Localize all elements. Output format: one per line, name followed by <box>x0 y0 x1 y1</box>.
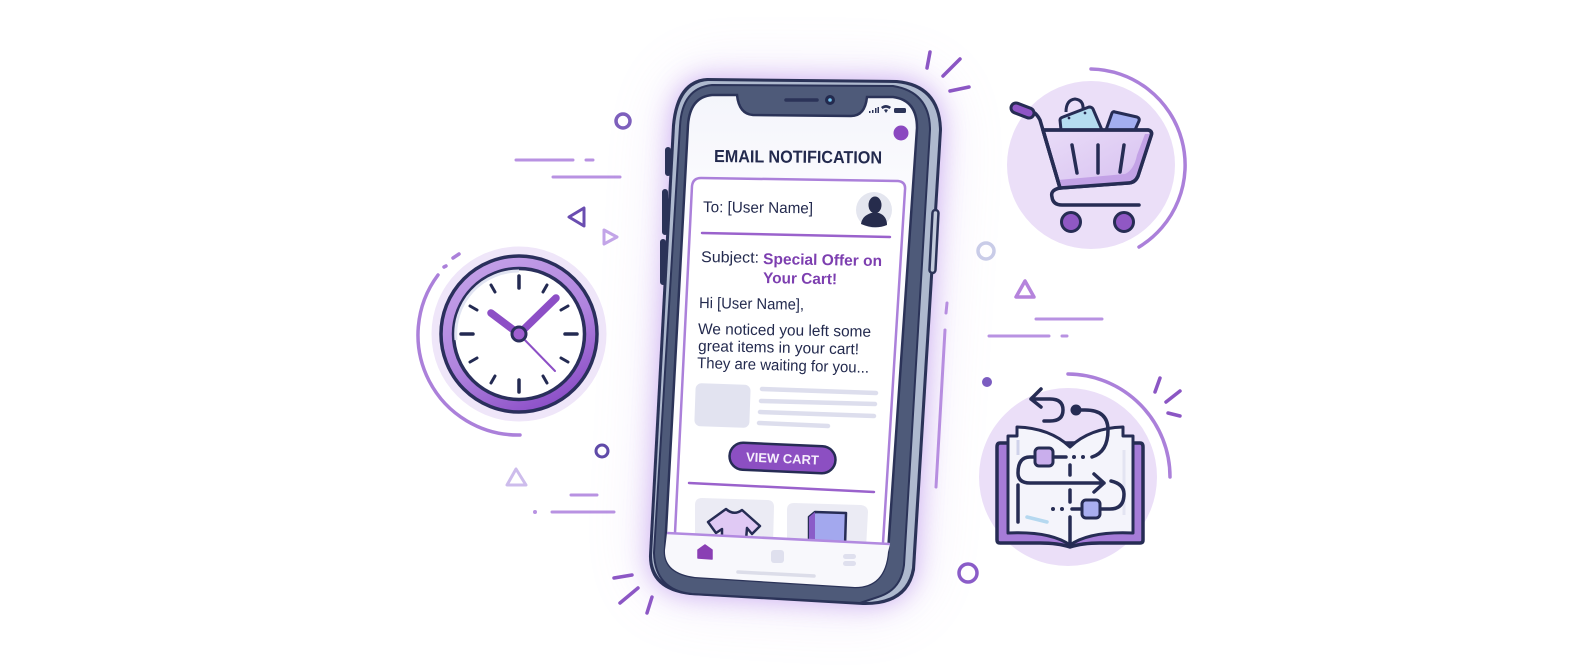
product tile: shirt <box>695 498 774 545</box>
avatar <box>856 192 892 228</box>
decoration: right accents <box>927 52 1180 582</box>
subject: Subject: <box>701 249 759 267</box>
decoration: left accents <box>507 114 652 613</box>
product tile: book <box>787 503 868 548</box>
email card outline <box>675 178 905 543</box>
shopping bag <box>1060 99 1139 130</box>
product placeholder <box>694 383 876 428</box>
icon: open book with journey flow <box>979 374 1170 566</box>
heading: email notification: EMAIL NOTIFICATION <box>714 146 882 167</box>
screen <box>665 95 917 587</box>
icon: shopping cart <box>1007 69 1185 249</box>
subject: Special Offer on <box>763 251 882 270</box>
bottom navigation bar <box>665 533 890 587</box>
icon: clock <box>418 246 606 435</box>
email body: They are waiting for you... <box>697 355 869 377</box>
email body: We noticed you left some <box>698 321 871 341</box>
button: view cart: VIEW CART <box>746 449 819 468</box>
notch: speaker and camera <box>786 95 835 105</box>
phone <box>649 78 942 605</box>
notification dot <box>894 126 908 140</box>
recipient line: To: [User Name] <box>703 199 813 217</box>
email body: great items in your cart! <box>698 338 859 358</box>
subject <box>701 249 882 288</box>
button: view cart <box>729 442 836 474</box>
email body <box>697 295 871 377</box>
status icons <box>869 105 906 113</box>
subject: Your Cart! <box>763 270 837 288</box>
email body: Hi [User Name], <box>699 295 804 314</box>
flow lines <box>1018 389 1124 543</box>
